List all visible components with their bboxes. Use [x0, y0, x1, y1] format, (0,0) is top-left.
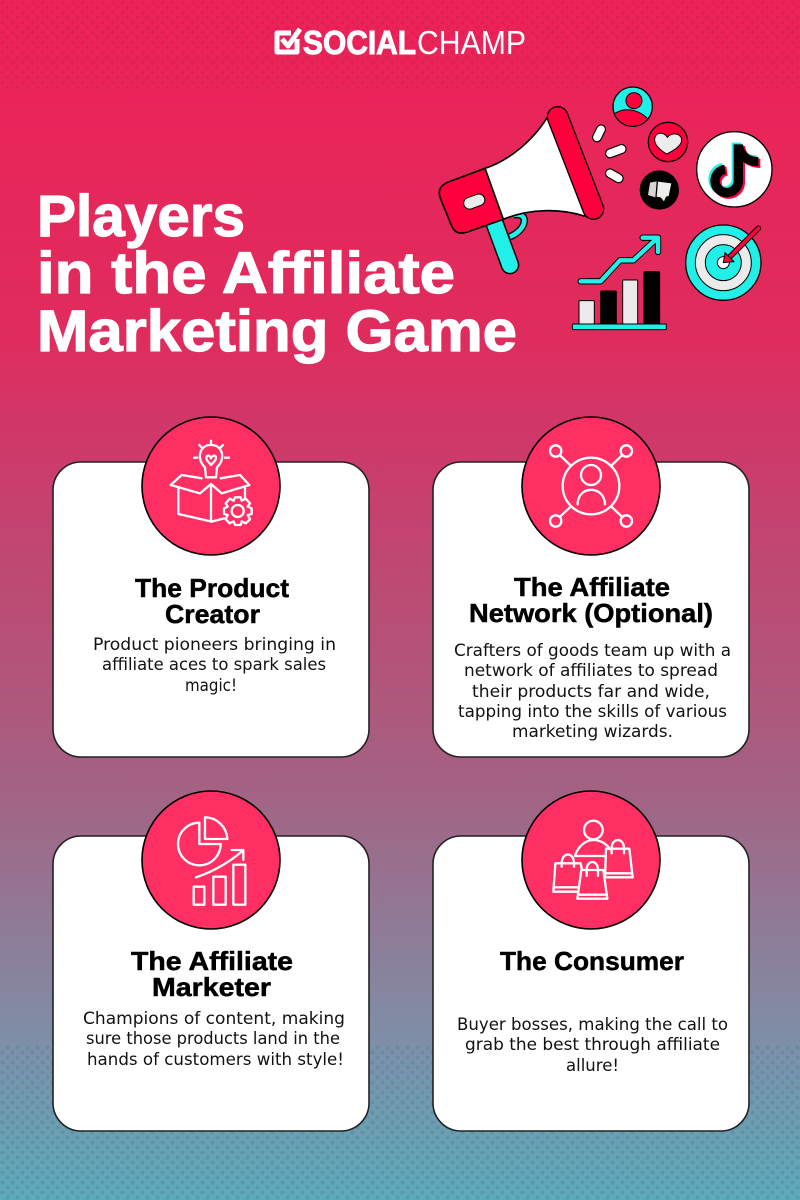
- icon: logo checkbox: [277, 29, 300, 52]
- icon: target with arrow: [686, 225, 761, 300]
- panel: The Consumer: [433, 791, 749, 1131]
- icon: person with shopping bags: [553, 821, 633, 899]
- logo: Social Champ: [277, 24, 526, 61]
- icon: comment badge: [640, 170, 679, 210]
- icon: growth bar chart: [572, 238, 666, 330]
- panel: The Consumer: The Consumer: [500, 946, 684, 976]
- panel: The Affiliate Network: network of affiliates to spread: [464, 661, 718, 680]
- icon: user badge: [613, 87, 652, 128]
- panel: The Consumer: grab the best through affiliate: [465, 1035, 720, 1054]
- icon: megaphone: [439, 113, 593, 265]
- illustration: megaphone and social icons: [439, 87, 772, 330]
- panel: The Affiliate Marketer: Marketer: [152, 972, 271, 1002]
- panel: The Product Creator: magic!: [185, 676, 237, 695]
- title: Marketing Game: [37, 299, 517, 364]
- logo: Social Champ: SOCIAL: [303, 24, 416, 61]
- icon: pie chart and growth bars: [178, 817, 245, 905]
- panel: The Affiliate Network: The Affiliate: [514, 572, 670, 602]
- icon: TikTok badge: [697, 132, 772, 207]
- panel: The Affiliate Network: Network (Optional): [469, 598, 713, 628]
- panel: The Product Creator: affiliate aces to spark sales: [102, 655, 326, 674]
- panel: The Affiliate Network: [433, 417, 749, 757]
- icon: product box with bulb and gear: [171, 441, 252, 525]
- panel: The Affiliate Network: their products far and wide,: [472, 682, 710, 701]
- panel: The Affiliate Marketer: sure those products land in the: [86, 1029, 340, 1048]
- title: in the Affiliate: [37, 241, 455, 306]
- panel: The Affiliate Marketer: The Affiliate: [131, 946, 293, 976]
- icon: network person: [550, 445, 632, 527]
- panel: The Affiliate Network: marketing wizards.: [512, 722, 673, 741]
- icon: heart badge: [648, 122, 688, 162]
- panel: The Affiliate Marketer: Champions of content, making: [83, 1009, 345, 1028]
- panel: The Product Creator: The Product: [135, 573, 289, 603]
- panel: The Affiliate Network: Crafters of goods team up with a: [454, 641, 731, 660]
- icon: sound dashes: [597, 129, 622, 178]
- panel: The Affiliate Network: tapping into the skills of various: [458, 702, 727, 721]
- panel: The Consumer: Buyer bosses, making the call to: [457, 1015, 728, 1034]
- title: Players: [37, 184, 245, 249]
- panel: The Product Creator: [53, 417, 369, 757]
- logo: Social Champ: CHAMP: [417, 24, 526, 61]
- panel: The Consumer: allure!: [566, 1056, 619, 1075]
- panel: The Product Creator: Creator: [165, 599, 260, 629]
- title: [37, 184, 517, 364]
- panel: The Affiliate Marketer: [53, 791, 369, 1131]
- panel: The Product Creator: Product pioneers bringing in: [93, 635, 336, 654]
- panel: The Affiliate Marketer: hands of customers with style!: [87, 1050, 344, 1069]
